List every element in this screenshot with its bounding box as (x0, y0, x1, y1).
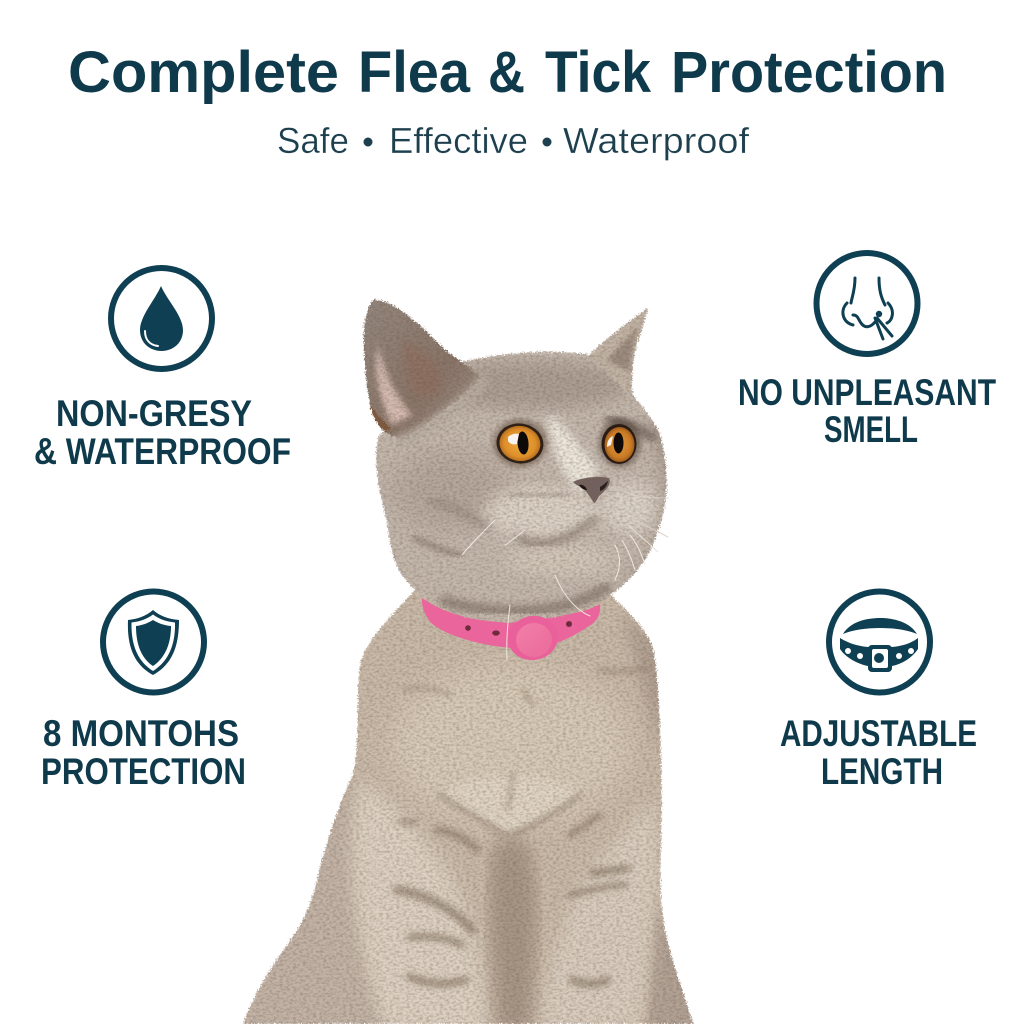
cheek and mouth lines (413, 537, 462, 555)
ear base blend into head (396, 378, 486, 442)
subtitle: Waterproof (563, 120, 750, 161)
title: Protection (671, 40, 947, 105)
chin (511, 544, 608, 576)
title: Tick (545, 40, 652, 105)
cat ear left (364, 300, 486, 442)
feature: no unpleasant smell (738, 253, 996, 450)
label: 8 montohs protection: PROTECTION (41, 751, 246, 792)
whiskers (462, 495, 668, 660)
cat eye left (493, 419, 547, 467)
cat ear right (588, 308, 648, 398)
collar buckle (505, 612, 561, 664)
label: no unpleasant smell: NO UNPLEASANT (738, 372, 996, 413)
label: adjustable length (780, 713, 977, 792)
title: Flea (358, 40, 471, 105)
icon: nose (816, 253, 918, 354)
label: non-gresy and waterproof: & WATERPROOF (34, 431, 291, 472)
centre shadow (489, 840, 537, 1024)
cat nose (573, 477, 610, 503)
label: non-gresy and waterproof: NON-GRESY (56, 393, 252, 434)
fur chevrons (397, 668, 645, 984)
feature: non-greasy and waterproof (34, 268, 291, 472)
label: 8 montohs protection (41, 713, 246, 792)
cat head (376, 352, 690, 621)
cat illustration (240, 300, 700, 1024)
icon: water drop (111, 268, 212, 369)
label: adjustable length: LENGTH (821, 751, 943, 792)
icon: collar (829, 592, 930, 692)
subtitle (277, 120, 750, 161)
title: & (488, 40, 525, 105)
subtitle: Effective (389, 120, 528, 161)
muzzle (484, 487, 600, 539)
cat eye right (599, 419, 641, 467)
subtitle: Safe (277, 120, 349, 161)
icon: shield (103, 592, 204, 692)
feature: adjustable length (780, 592, 977, 792)
cat body (240, 590, 700, 1024)
label: no unpleasant smell (738, 372, 996, 450)
label: 8 montohs protection: 8 MONTOHS (43, 713, 239, 754)
label: non-gresy and waterproof (34, 393, 291, 472)
feature: 8 months protection (41, 592, 246, 792)
title: Complete (68, 40, 339, 105)
label: adjustable length: ADJUSTABLE (780, 713, 977, 754)
label: no unpleasant smell: SMELL (824, 409, 918, 450)
title (68, 40, 947, 105)
white blaze (548, 415, 600, 495)
chest highlights (390, 665, 630, 825)
pink collar band (422, 598, 600, 648)
chest V highlight (443, 776, 580, 832)
haunch shading (243, 782, 350, 1022)
